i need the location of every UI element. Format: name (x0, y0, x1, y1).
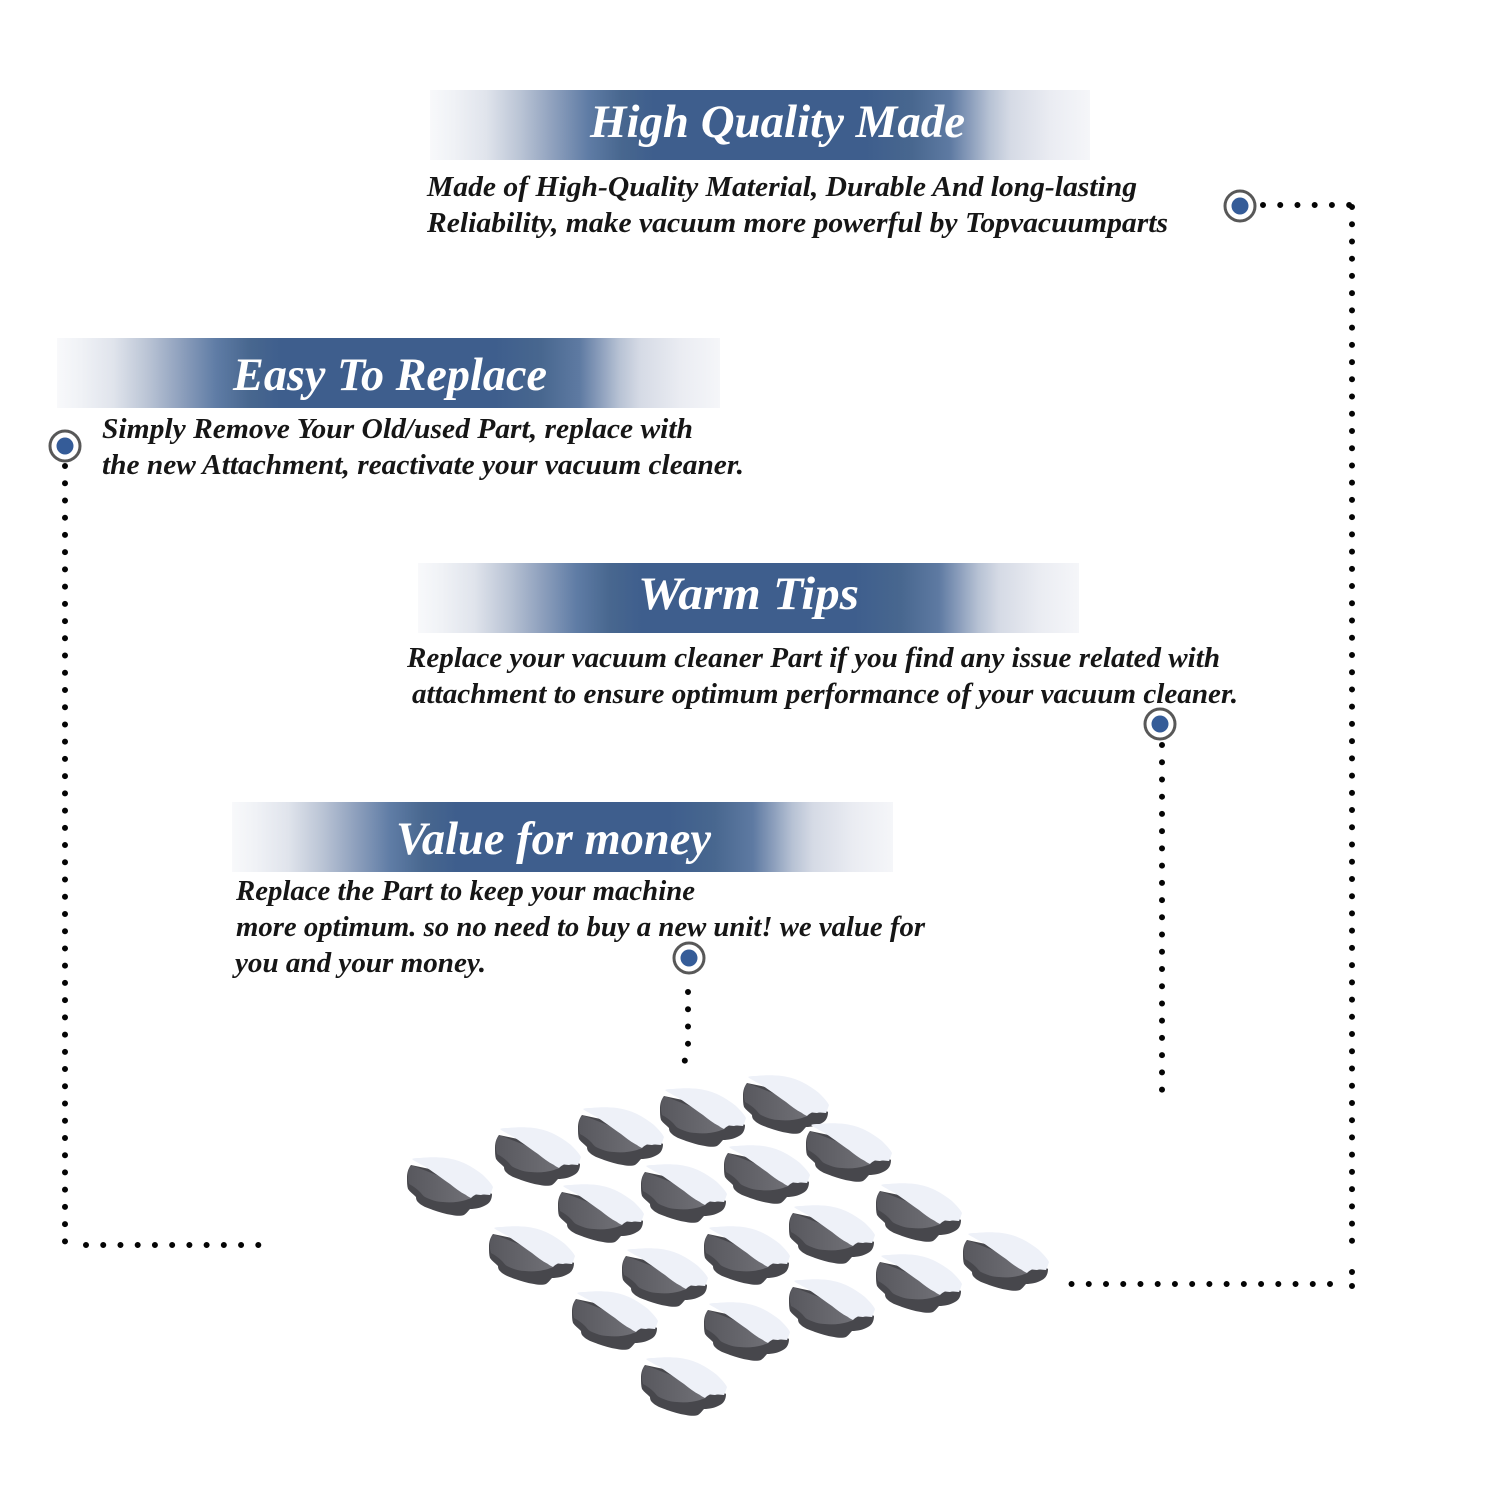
panel: value for money (232, 802, 926, 979)
heading band: easy to replace (57, 338, 720, 408)
text block: value for money: Replace the Part to keep your machine (235, 875, 695, 907)
connector: value for money to product (683, 992, 688, 1070)
text block: value for money: you and your money. (232, 947, 486, 979)
connector: easy to replace to product (65, 466, 259, 1245)
heading band: high quality made: High Quality Made (589, 96, 965, 148)
text block: warm tips: Replace your vacuum cleaner Part if you find any issue related with (406, 642, 1220, 674)
panel: high quality made (426, 90, 1168, 239)
heading band: value for money: Value for money (396, 813, 711, 865)
product: adhesive foam pucks (407, 1075, 1049, 1416)
text block: warm tips: attachment to ensure optimum performance of your vacuum cleaner. (412, 678, 1238, 710)
heading band: high quality made (430, 90, 1090, 160)
panel: warm tips (406, 563, 1238, 710)
heading band: warm tips (418, 563, 1079, 633)
marker: value for money (674, 943, 704, 973)
heading band: easy to replace: Easy To Replace (232, 349, 547, 401)
text block: high quality made: Made of High-Quality Material, Durable And long-lasting (426, 171, 1137, 203)
connector: high quality made to product (1070, 205, 1352, 1286)
heading band: warm tips: Warm Tips (638, 568, 859, 620)
text block: easy to replace: the new Attachment, reactivate your vacuum cleaner. (102, 449, 744, 481)
panel: easy to replace (57, 338, 744, 481)
heading band: value for money (232, 802, 893, 872)
marker: easy to replace (50, 431, 80, 461)
connector: warm tips to product (1159, 745, 1165, 1091)
text block: high quality made: Reliability, make vacuum more powerful by Topvacuumparts (426, 207, 1168, 239)
marker: high quality made (1225, 191, 1255, 221)
text block: value for money: more optimum. so no need to buy a new unit! we value for (236, 911, 926, 943)
text block: easy to replace: Simply Remove Your Old/used Part, replace with (102, 413, 693, 445)
marker: warm tips (1145, 709, 1175, 739)
